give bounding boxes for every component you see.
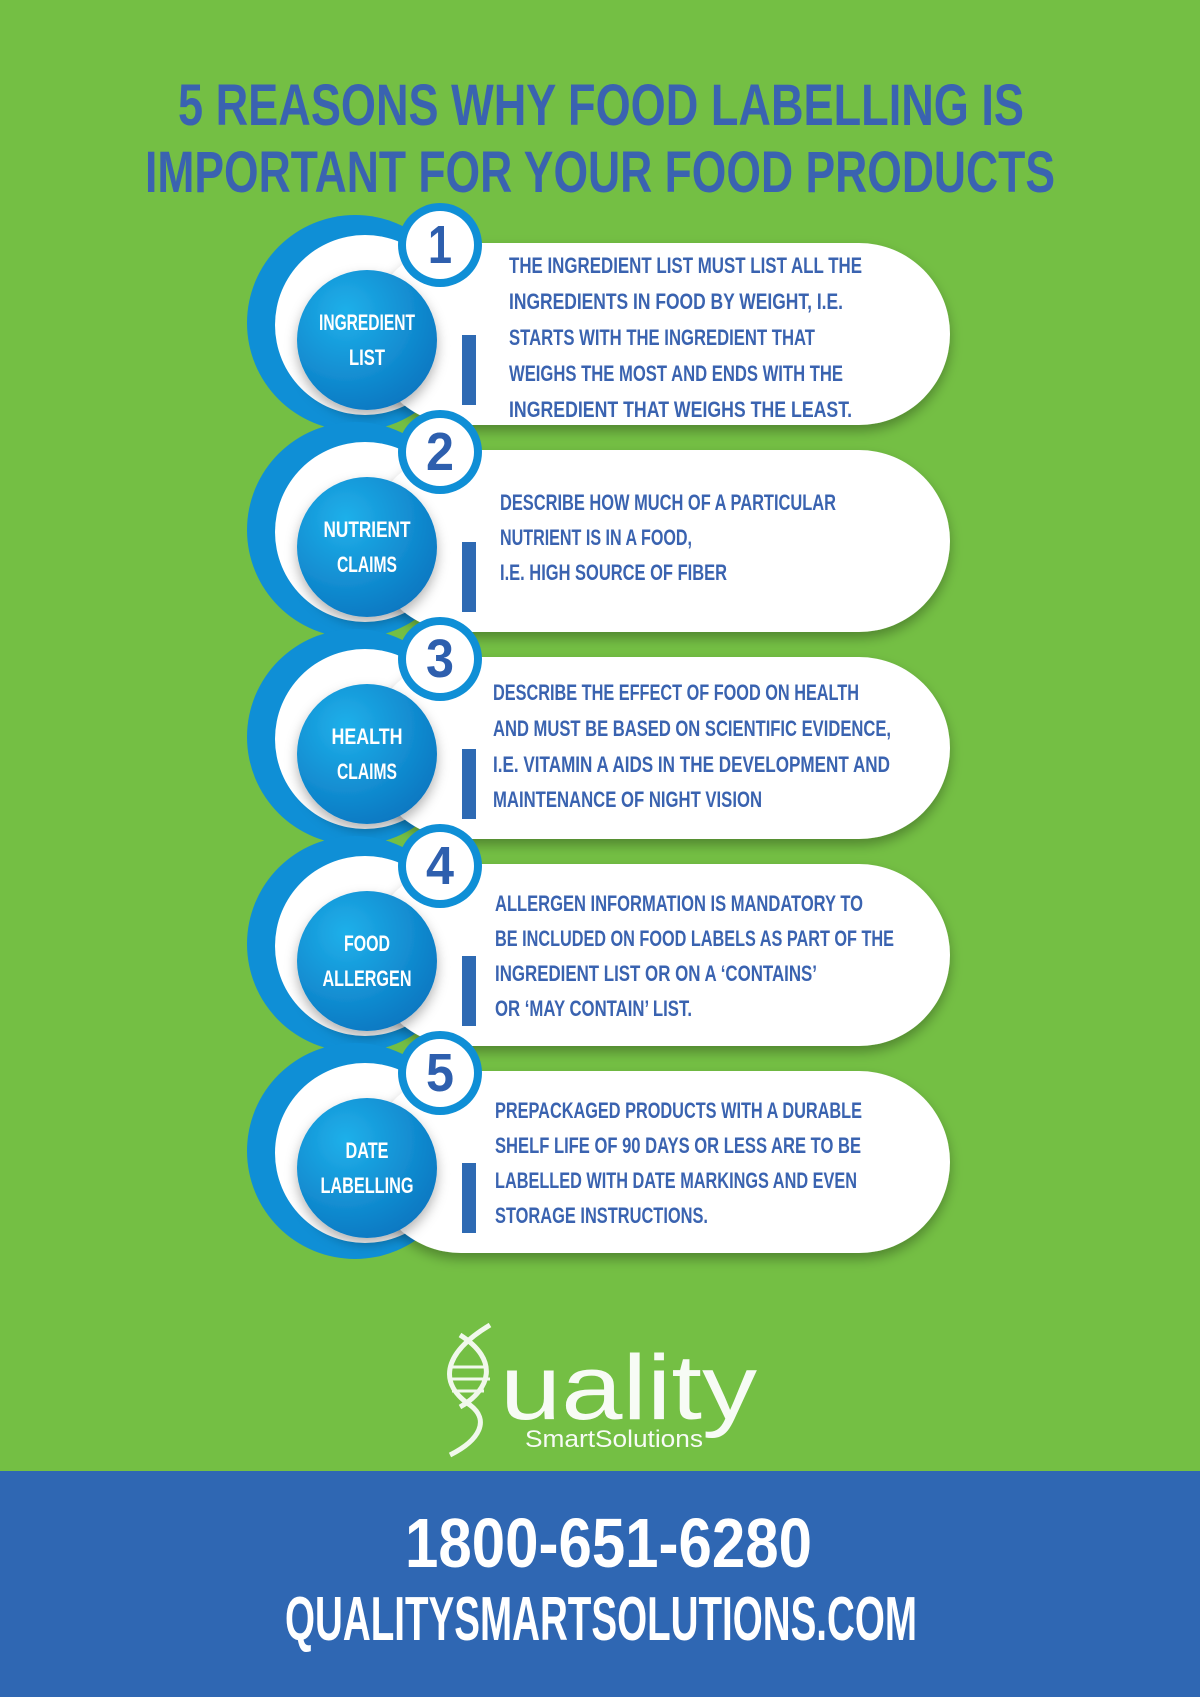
item 3 — [247, 617, 950, 845]
item 5: SHELF LIFE OF 90 DAYS OR LESS ARE TO BE — [495, 1133, 861, 1158]
item 5: PREPACKAGED PRODUCTS WITH A DURABLE — [495, 1098, 862, 1123]
item 3: CLAIMS — [337, 759, 397, 784]
item 4: 4 — [426, 836, 454, 896]
item 4 — [247, 824, 950, 1052]
item 5: DATE — [346, 1138, 388, 1163]
text: INGREDIENTS IN FOOD BY WEIGHT, I.E. — [509, 289, 843, 314]
phone: 1800-651-6280 — [405, 1504, 812, 1582]
logo — [447, 1322, 757, 1458]
item 4: ALLERGEN INFORMATION IS MANDATORY TO — [495, 891, 863, 916]
item 2: DESCRIBE HOW MUCH OF A PARTICULAR — [500, 490, 836, 515]
logo: SmartSolutions — [525, 1426, 703, 1453]
logo text: uality — [500, 1337, 757, 1439]
item 5: 5 — [426, 1043, 454, 1103]
item 3: HEALTH — [332, 724, 402, 749]
title — [145, 73, 1055, 205]
item 4: FOOD — [344, 931, 390, 956]
item 3: MAINTENANCE OF NIGHT VISION — [493, 787, 762, 812]
text: INGREDIENT THAT WEIGHS THE LEAST. — [509, 397, 852, 422]
item 3: AND MUST BE BASED ON SCIENTIFIC EVIDENCE, — [493, 716, 891, 741]
item 5 — [247, 1031, 950, 1259]
item 5: STORAGE INSTRUCTIONS. — [495, 1203, 708, 1228]
item 5: LABELLING — [320, 1173, 414, 1198]
text: STARTS WITH THE INGREDIENT THAT — [509, 325, 815, 350]
footer — [0, 1471, 1200, 1697]
item 1 — [247, 203, 950, 431]
item 4: OR ‘MAY CONTAIN’ LIST. — [495, 996, 692, 1021]
icon: dna — [450, 1325, 490, 1455]
item 5: LABELLED WITH DATE MARKINGS AND EVEN — [495, 1168, 857, 1193]
item 3: I.E. VITAMIN A AIDS IN THE DEVELOPMENT AND — [493, 752, 890, 777]
item 4: BE INCLUDED ON FOOD LABELS AS PART OF THE — [495, 926, 894, 951]
item 2: NUTRIENT — [324, 517, 411, 542]
text: WEIGHS THE MOST AND ENDS WITH THE — [509, 361, 843, 386]
item 2: CLAIMS — [337, 552, 397, 577]
label: LIST — [349, 345, 385, 370]
item 4: ALLERGEN — [322, 966, 412, 991]
text — [509, 253, 862, 422]
item 3: DESCRIBE THE EFFECT OF FOOD ON HEALTH — [493, 680, 859, 705]
text: THE INGREDIENT LIST MUST LIST ALL THE — [509, 253, 862, 278]
item 3: 3 — [426, 629, 454, 689]
item 2: I.E. HIGH SOURCE OF FIBER — [500, 560, 727, 585]
items — [247, 203, 956, 1265]
item 2: 2 — [426, 422, 454, 482]
item 2: NUTRIENT IS IN A FOOD, — [500, 525, 692, 550]
item 4: INGREDIENT LIST OR ON A ‘CONTAINS’ — [495, 961, 817, 986]
label: INGREDIENT — [319, 310, 415, 335]
number: 1 — [428, 215, 452, 275]
label — [319, 310, 415, 370]
item 2 — [247, 410, 950, 638]
